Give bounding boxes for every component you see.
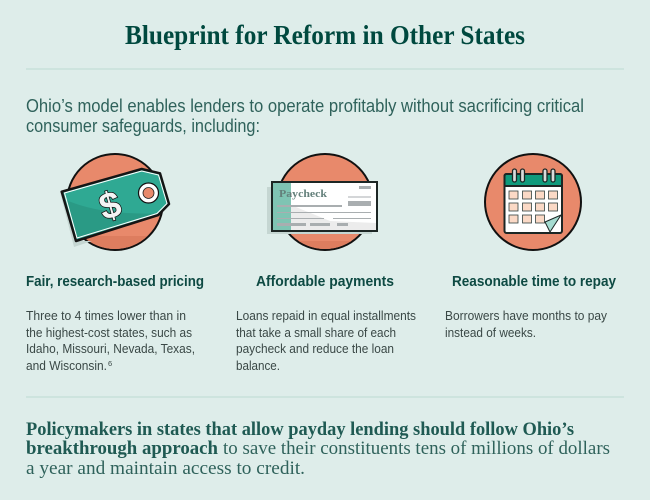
column 2 text — [236, 309, 416, 373]
column 2 heading: Affordable payments — [256, 273, 394, 290]
column 1 text: and Wisconsin. — [26, 359, 107, 373]
policy recommendation: a year and maintain access to credit. — [26, 459, 305, 479]
column 2 text: balance. — [236, 359, 280, 373]
column 2 text: that take a small share of each — [236, 326, 396, 340]
intro text — [26, 96, 584, 136]
column 3 text — [445, 309, 608, 340]
column 3 heading: Reasonable time to repay — [452, 273, 617, 290]
column 2 text: Loans repaid in equal installments — [236, 309, 416, 323]
policy recommendation: to save their constituents tens of millions of dollars — [223, 439, 610, 459]
column 2 text: paycheck and reduce the loan — [236, 342, 394, 356]
icon: paycheck: Paycheck — [279, 189, 328, 200]
icon: paycheck — [267, 154, 377, 253]
column 1 text: 6 — [108, 359, 112, 368]
intro text: Ohio’s model enables lenders to operate profitably without sacrificing critical — [26, 96, 584, 116]
column 1 text — [26, 309, 195, 373]
title: Blueprint for Reform in Other States — [125, 20, 525, 50]
column 1 text: the highest-cost states, such as — [26, 326, 192, 340]
policy recommendation — [26, 420, 610, 479]
icon: calendar — [485, 154, 581, 250]
intro text: consumer safeguards, including: — [26, 116, 260, 136]
column 1 text: Three to 4 times lower than in — [26, 309, 186, 323]
column 1 heading: Fair, research-based pricing — [26, 273, 204, 290]
icon: price tag: $ — [95, 183, 126, 228]
column 3 text: instead of weeks. — [445, 326, 536, 340]
policy recommendation: Policymakers in states that allow payday lending should follow Ohio’s — [26, 420, 574, 440]
policy recommendation: breakthrough approach — [26, 439, 219, 459]
icon: price tag — [60, 154, 170, 252]
column 1 text: Idaho, Missouri, Nevada, Texas, — [26, 342, 195, 356]
column 3 text: Borrowers have months to pay — [445, 309, 608, 323]
